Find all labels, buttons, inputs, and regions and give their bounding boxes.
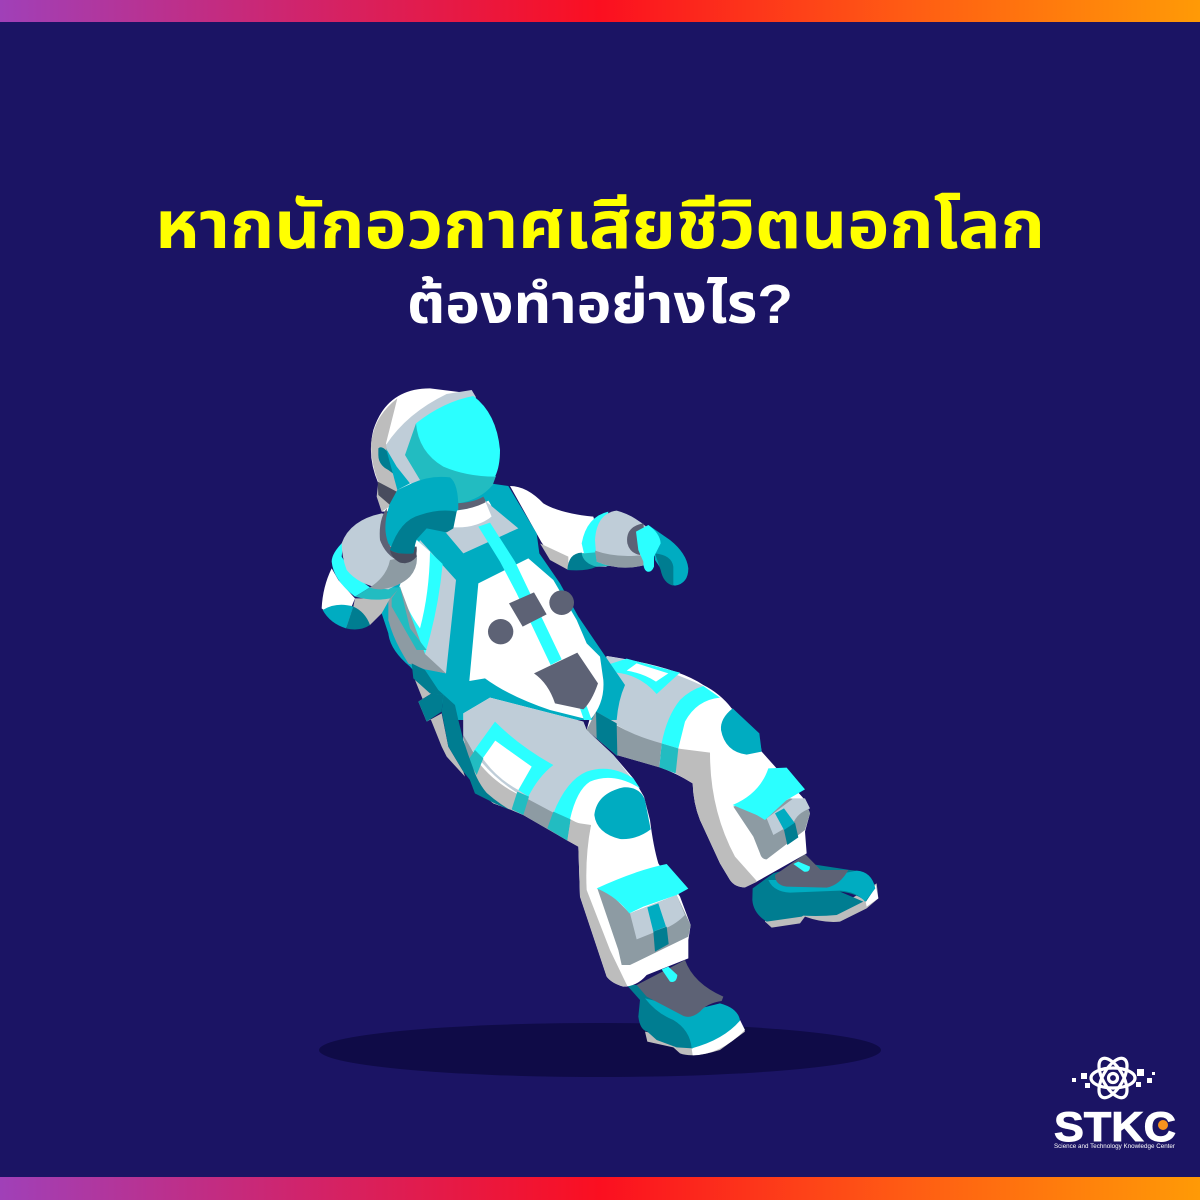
far leg shin shading bbox=[676, 748, 757, 887]
far pocket bbox=[733, 768, 810, 859]
far knee pad bbox=[721, 708, 762, 755]
crotch strap bbox=[587, 712, 617, 756]
upper leg teal edge bbox=[470, 778, 510, 810]
logo orange dot bbox=[1158, 1120, 1168, 1130]
astronaut torso and arms bbox=[322, 388, 688, 720]
near glove bbox=[380, 477, 458, 563]
helmet bbox=[371, 388, 500, 512]
far leg silhouette bbox=[587, 656, 810, 887]
logo tagline: Science and Technology Knowledge Center bbox=[1054, 1144, 1175, 1150]
far leg bbox=[587, 656, 878, 928]
suit base teal bbox=[382, 483, 625, 720]
top gradient bar bbox=[0, 0, 1200, 22]
near shin shade bbox=[578, 825, 627, 987]
logo wordmark: STKC bbox=[1054, 1103, 1176, 1150]
far arm bbox=[510, 486, 648, 570]
far thigh cyan band bbox=[662, 686, 720, 748]
subtitle: ต้องทำอย่างไร? bbox=[407, 273, 793, 335]
floor shadow bbox=[319, 1023, 881, 1077]
near leg silhouette bbox=[463, 698, 691, 987]
chest instruments bbox=[488, 590, 598, 709]
left chest panel bbox=[388, 540, 456, 673]
far thigh lower shade bbox=[587, 712, 662, 767]
far boot bbox=[752, 854, 878, 928]
illustration: astronaut bbox=[322, 388, 878, 1055]
bottom gradient bar bbox=[0, 1177, 1200, 1200]
collar bbox=[447, 501, 493, 528]
harness strap bbox=[418, 693, 443, 722]
near shoulder bbox=[322, 513, 417, 629]
near pocket bbox=[597, 864, 691, 965]
near thigh cyan band bbox=[553, 769, 640, 819]
far glove bbox=[627, 523, 688, 586]
far thigh patch bbox=[610, 659, 680, 694]
logo data squares bbox=[1072, 1069, 1155, 1088]
far thigh panel bbox=[603, 656, 703, 744]
logo atom icon bbox=[1091, 1054, 1135, 1102]
chest cyan stripe bbox=[478, 523, 562, 665]
lower back shade bbox=[415, 680, 465, 777]
title: หากนักอวกาศเสียชีวิตนอกโลก bbox=[155, 188, 1045, 263]
near knee pad bbox=[594, 787, 651, 839]
chest white panel bbox=[469, 558, 603, 720]
near thigh lower shade bbox=[463, 735, 591, 847]
near boot bbox=[627, 960, 745, 1055]
near leg bbox=[412, 663, 745, 1055]
near thigh panel bbox=[463, 698, 632, 813]
lower harness band bbox=[412, 663, 510, 810]
chest panel bbox=[445, 501, 518, 553]
logo: STKC bbox=[1054, 1054, 1176, 1150]
near thigh patch bbox=[473, 722, 553, 797]
neck ring bbox=[457, 497, 487, 510]
